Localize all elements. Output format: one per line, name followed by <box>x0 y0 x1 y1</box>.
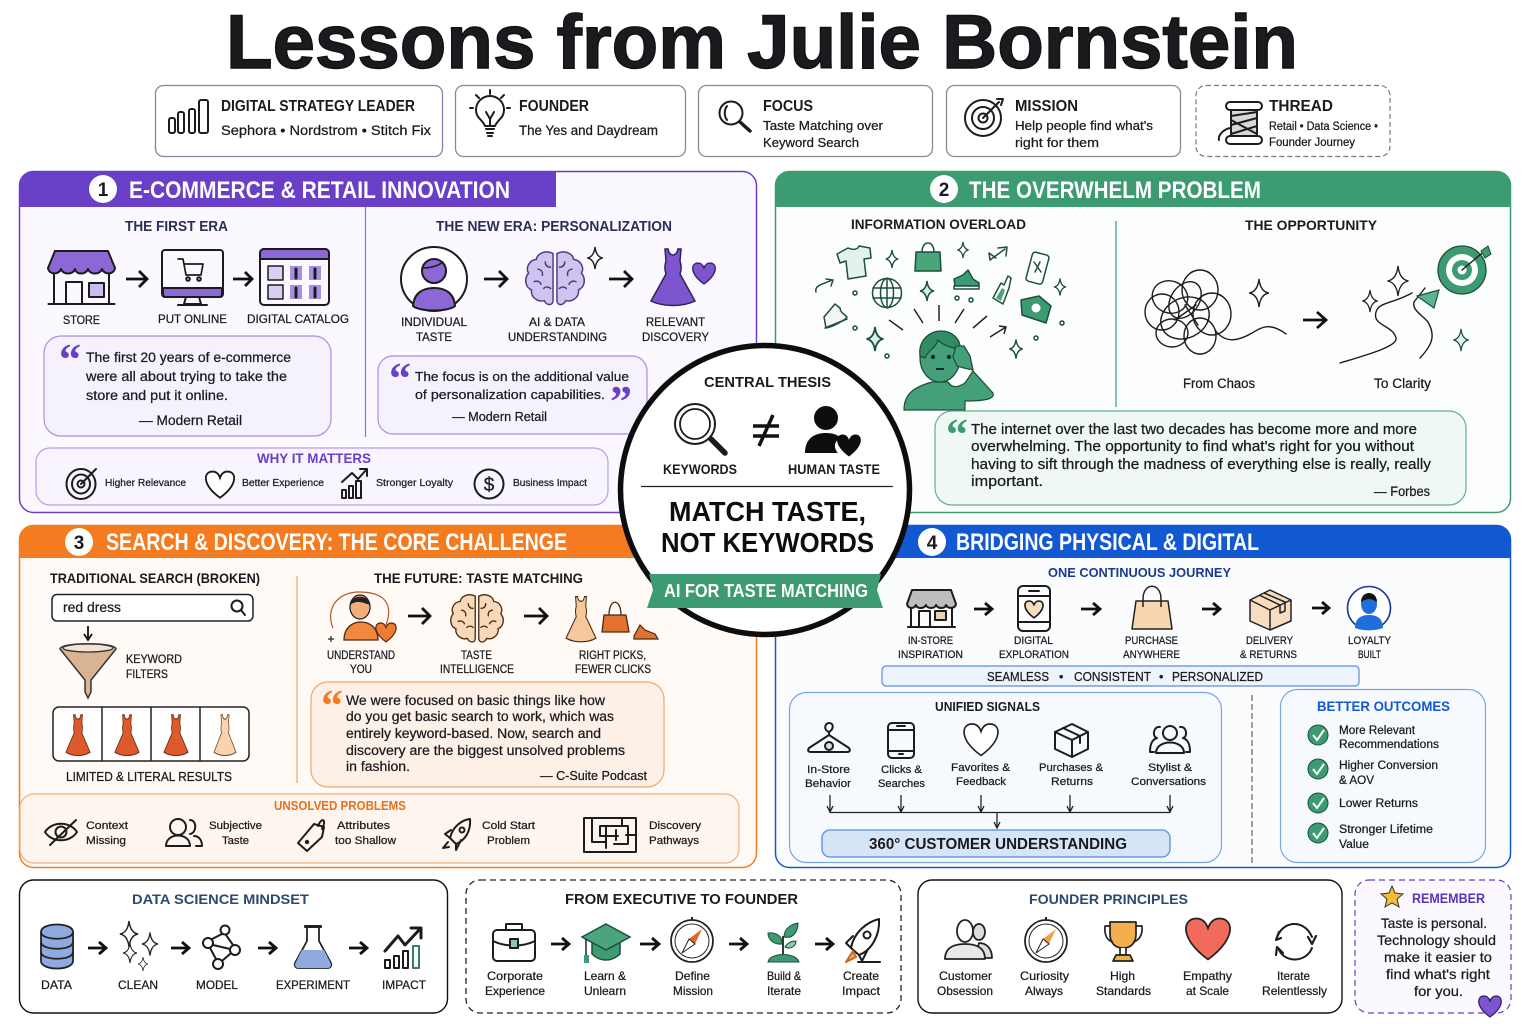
not equal sign <box>753 415 779 446</box>
panel: better outcomes: BETTER OUTCOMES <box>1317 698 1450 714</box>
callout: quote c-suite podcast: in fashion. <box>346 759 410 774</box>
icon: two people <box>166 819 202 846</box>
icon: in-store <box>907 590 956 627</box>
card text <box>763 98 884 150</box>
icon: flask <box>295 925 331 968</box>
icon: digital catalog <box>260 249 329 305</box>
arrow <box>88 942 106 954</box>
labels: Experience <box>485 984 545 998</box>
labels <box>41 978 427 992</box>
thesis statement: MATCH TASTE, <box>669 496 866 527</box>
labels: Relentlessly <box>1262 984 1327 998</box>
info card: founder <box>456 86 686 156</box>
icon: sparkles <box>120 921 158 971</box>
info card: focus <box>698 86 932 156</box>
bar: seamless consistent personalized: CONSISTENT <box>1074 670 1151 684</box>
card text: FOUNDER <box>519 98 589 115</box>
arrow <box>84 626 92 640</box>
icon: heart <box>964 724 998 756</box>
bar: seamless consistent personalized: • <box>1159 670 1163 684</box>
card text: THREAD <box>1269 98 1333 115</box>
card text: FOCUS <box>763 98 813 115</box>
info card: digital strategy leader <box>156 86 442 156</box>
callout: quote c-suite podcast <box>311 681 664 787</box>
labels: first era steps: DIGITAL CATALOG <box>247 312 349 326</box>
labels: signals: Stylist & <box>1148 762 1193 774</box>
icon: brain taste intelligence <box>451 595 503 642</box>
bar: seamless consistent personalized <box>882 666 1359 686</box>
labels: at Scale <box>1186 984 1229 998</box>
callout: quote forbes: The internet over the last two decades has become more and more <box>971 422 1417 438</box>
icon: store <box>48 251 115 304</box>
card text: The Yes and Daydream <box>519 123 658 138</box>
labels: EXPERIMENT <box>276 978 351 992</box>
body text: Taste is personal. <box>1381 915 1487 931</box>
arrow <box>484 271 507 287</box>
arrow <box>126 271 147 287</box>
icon: iterate cycle <box>1276 924 1316 960</box>
icon: price tag <box>298 820 324 851</box>
labels: outcomes list: Higher Conversion <box>1339 760 1438 772</box>
icon: eye crossed <box>45 820 77 845</box>
labels: unsolved problems items: Discovery <box>649 820 702 832</box>
labels: unsolved problems items: Cold Start <box>482 820 535 832</box>
arrow <box>1303 312 1326 328</box>
heading: information overload: INFORMATION OVERLOAD <box>851 216 1026 232</box>
callout: quote first era: store and put it online. <box>86 388 228 403</box>
labels: future steps: YOU <box>350 664 372 676</box>
labels: unsolved problems items: Subjective <box>209 820 262 832</box>
labels: new era steps: INDIVIDUAL <box>401 315 467 329</box>
illustration: floating items overload <box>816 242 1066 358</box>
header band: 3 <box>74 533 84 554</box>
labels: why it matters items: Stronger Loyalty <box>376 477 454 489</box>
arrow <box>408 608 430 624</box>
illustration: clear path to target <box>1340 246 1491 363</box>
card text: MISSION <box>1015 98 1078 115</box>
icon: box <box>1055 724 1088 757</box>
labels: journey steps: & RETURNS <box>1240 649 1297 661</box>
icon: seedling <box>768 923 799 962</box>
callout: quote forbes: — Forbes <box>1374 483 1430 499</box>
icon: target <box>66 469 96 499</box>
callout: quote first era: were all about trying to take the <box>85 369 287 384</box>
panel: unsolved problems: UNSOLVED PROBLEMS <box>274 799 406 813</box>
icon: hanger <box>808 723 850 752</box>
arrow <box>729 938 747 950</box>
panel: search and discovery <box>19 525 756 868</box>
icon: dollar: $ <box>484 475 495 496</box>
labels: keywords vs human taste: HUMAN TASTE <box>788 462 880 477</box>
labels: signals: Behavior <box>805 778 851 790</box>
heading: FROM EXECUTIVE TO FOUNDER <box>565 892 799 908</box>
results grid of dresses <box>53 707 249 761</box>
heading: traditional search: TRADITIONAL SEARCH (BROKEN) <box>50 570 260 586</box>
labels: unsolved problems items: Pathways <box>649 835 700 847</box>
callout: quote forbes: “ <box>946 410 968 459</box>
labels: journey steps <box>898 635 1392 661</box>
icon: delivery box <box>1250 590 1291 630</box>
heading: FOUNDER PRINCIPLES <box>1029 891 1188 907</box>
bar: seamless consistent personalized: PERSONALIZED <box>1172 670 1263 684</box>
callout: quote new era: of personalization capabilities. <box>415 387 605 402</box>
labels: from chaos to clarity: To Clarity <box>1374 376 1431 391</box>
arrow <box>1202 603 1220 615</box>
labels: why it matters items: Business Impact <box>513 477 587 489</box>
labels: Obsession <box>937 984 993 998</box>
icon: model network <box>203 926 240 969</box>
icon: magnifier keywords <box>675 404 725 453</box>
icon: brain <box>526 247 603 305</box>
callout: quote new era: ” <box>610 377 632 426</box>
labels: Always <box>1025 984 1063 998</box>
heading: one continuous journey: ONE CONTINUOUS JOURNEY <box>1048 565 1231 580</box>
body text: find what's right <box>1386 966 1490 982</box>
icon: individual taste person <box>401 247 467 311</box>
callout: quote forbes <box>935 410 1466 505</box>
heading: the opportunity: THE OPPORTUNITY <box>1245 217 1378 233</box>
icon: compass <box>671 917 713 962</box>
card text: Retail • Data Science • <box>1269 121 1378 133</box>
icon: group of people <box>1150 726 1190 753</box>
icon: dress and heart <box>651 249 715 306</box>
labels: signals: Searches <box>878 778 925 790</box>
labels: Standards <box>1096 984 1151 998</box>
labels: signals: Purchases & <box>1039 762 1104 774</box>
labels: journey steps: ANYWHERE <box>1123 649 1180 661</box>
labels: unsolved problems items: too Shallow <box>335 835 396 847</box>
callout: quote first era: The first 20 years of e-commerce <box>86 350 291 365</box>
labels: outcomes list <box>1339 725 1439 851</box>
icon: light bulb <box>470 90 510 136</box>
labels: unsolved problems items: Problem <box>487 835 530 847</box>
labels: journey steps: DELIVERY <box>1246 635 1294 647</box>
icon: compass <box>1025 917 1067 962</box>
labels: signals: Returns <box>1051 776 1094 788</box>
labels: Build & <box>767 969 801 983</box>
icon: loyalty user <box>1348 586 1390 630</box>
icon: phone <box>888 723 914 758</box>
labels: Iterate <box>1277 969 1310 983</box>
icon: trophy <box>1105 922 1142 961</box>
arrow <box>815 938 833 950</box>
panel: unsolved problems <box>20 794 739 863</box>
labels: outcomes list: Stronger Lifetime <box>1339 824 1433 836</box>
panel: why it matters <box>36 448 608 505</box>
card text: DIGITAL STRATEGY LEADER <box>221 98 415 115</box>
ribbon: ai for taste matching: AI FOR TASTE MATCHING <box>664 581 868 601</box>
labels: keywords vs human taste <box>663 462 880 477</box>
callout: quote new era: The focus is on the additional value <box>415 369 629 384</box>
labels: future steps: RIGHT PICKS, <box>579 650 646 662</box>
header band <box>775 171 1511 207</box>
search box: red dress <box>63 599 121 615</box>
labels: journey steps: DIGITAL <box>1014 635 1053 647</box>
labels: Create <box>843 969 879 983</box>
labels: unsolved problems items: Attributes <box>337 820 391 832</box>
labels: Impact <box>842 984 881 998</box>
labels: outcomes list: Value <box>1339 839 1369 851</box>
labels: from chaos to clarity: From Chaos <box>1183 376 1255 391</box>
box: 360 customer understanding: 360° CUSTOMER UNDERSTANDING <box>869 836 1127 853</box>
panel: why it matters: WHY IT MATTERS <box>257 450 371 466</box>
header band <box>19 525 700 558</box>
illustration: overwhelmed person <box>904 331 993 410</box>
icon: heart red <box>1186 918 1230 959</box>
labels: outcomes list: Lower Returns <box>1339 798 1418 810</box>
labels: IMPACT <box>382 978 427 992</box>
labels: Mission <box>673 984 713 998</box>
search box <box>52 594 253 621</box>
card text: Sephora • Nordstrom • Stitch Fix <box>221 123 431 138</box>
labels: new era steps: UNDERSTANDING <box>508 330 607 344</box>
bar: seamless consistent personalized: • <box>1059 670 1063 684</box>
label: limited results: LIMITED & LITERAL RESULTS <box>66 770 232 784</box>
icon: maze <box>584 818 636 852</box>
arrow <box>171 942 189 954</box>
labels: unsolved problems items: Missing <box>86 835 126 847</box>
icon: understand you <box>328 592 396 642</box>
header band: THE OVERWHELM PROBLEM <box>969 177 1261 204</box>
labels: future steps <box>327 650 651 676</box>
icon: star <box>1381 886 1403 907</box>
callout: quote new era: “ <box>389 354 411 403</box>
icon: heart <box>206 472 234 498</box>
labels: first era steps: STORE <box>63 313 100 327</box>
thesis statement <box>661 496 874 558</box>
labels: from chaos to clarity <box>1183 376 1431 391</box>
card text: right for them <box>1015 135 1099 150</box>
arrow <box>233 272 252 286</box>
panel: better outcomes <box>1280 690 1486 862</box>
panel: remember <box>1355 880 1511 1017</box>
header band: BRIDGING PHYSICAL & DIGITAL <box>956 529 1259 556</box>
callout: quote forbes: important. <box>971 474 1043 490</box>
callout: quote c-suite podcast: We were focused on basic things like how <box>346 693 605 708</box>
labels: unsolved problems items: Context <box>86 820 128 832</box>
icon: right picks dress bag shoe <box>566 597 658 642</box>
labels: first era steps: PUT ONLINE <box>158 312 227 326</box>
labels: signals: In-Store <box>807 764 850 776</box>
labels: journey steps: INSPIRATION <box>898 649 963 661</box>
arrow <box>524 608 547 624</box>
callout: quote c-suite podcast: discovery are the biggest unsolved problems <box>346 743 625 758</box>
header band: E-COMMERCE & RETAIL INNOVATION <box>129 177 510 204</box>
labels <box>485 969 881 998</box>
card text <box>1015 98 1154 150</box>
icon: phone with heart <box>1018 586 1050 631</box>
labels: new era steps: DISCOVERY <box>642 330 709 344</box>
labels: unsolved problems items: Taste <box>222 835 249 847</box>
labels: Learn & <box>584 969 626 983</box>
labels: Customer <box>939 969 992 983</box>
callout: quote c-suite podcast: do you get basic search to work, which was <box>346 709 614 724</box>
icon: bar chart <box>169 100 208 133</box>
heading: the new era: THE NEW ERA: PERSONALIZATION <box>436 219 672 235</box>
ribbon: ai for taste matching <box>647 574 883 608</box>
icon: database <box>41 924 73 968</box>
card text: Taste Matching over <box>763 118 884 133</box>
illustration: tangled scribble chaos <box>1145 270 1286 354</box>
panel: the overwhelm problem <box>775 171 1511 512</box>
labels: MODEL <box>196 978 238 992</box>
icon: human taste <box>805 406 861 457</box>
icon: customers <box>945 920 992 959</box>
panel: from executive to founder <box>466 880 901 1013</box>
heading: the first era: THE FIRST ERA <box>125 219 228 235</box>
labels: future steps: FEWER CLICKS <box>575 664 651 676</box>
labels: Iterate <box>767 984 801 998</box>
labels: new era steps: RELEVANT <box>646 315 706 329</box>
panel: unified signals: UNIFIED SIGNALS <box>935 700 1040 714</box>
labels: Define <box>675 969 710 983</box>
labels: DATA <box>41 978 72 992</box>
icon: dollar <box>474 470 504 498</box>
labels: signals: Favorites & <box>951 762 1011 774</box>
icon: purple heart <box>1479 996 1501 1017</box>
icon: thread spool <box>1219 102 1262 144</box>
labels: journey steps: BUILT <box>1358 649 1381 661</box>
callout: quote new era <box>378 354 647 434</box>
icon: impact growth <box>385 928 421 968</box>
card text <box>519 98 658 138</box>
panel: data science mindset <box>20 880 448 1013</box>
icon: target <box>965 99 1003 136</box>
panel: bridging physical and digital <box>776 525 1511 868</box>
body text: Technology should <box>1377 932 1496 948</box>
labels: future steps: UNDERSTAND <box>327 650 395 662</box>
thesis statement: NOT KEYWORDS <box>661 527 874 558</box>
header band: 4 <box>927 533 938 554</box>
heading: REMEMBER <box>1412 891 1485 906</box>
header band <box>19 171 556 207</box>
labels: first era steps <box>63 312 349 327</box>
labels: outcomes list: More Relevant <box>1339 725 1416 737</box>
labels: why it matters items: Higher Relevance <box>105 477 186 489</box>
card text: Founder Journey <box>1269 137 1355 149</box>
labels: why it matters items <box>105 477 587 489</box>
labels: why it matters items: Better Experience <box>242 477 324 489</box>
panel: founder principles <box>918 880 1342 1013</box>
header band: SEARCH & DISCOVERY: THE CORE CHALLENGE <box>106 529 567 556</box>
labels: future steps: INTELLIGENCE <box>440 664 514 676</box>
label: keyword filters: KEYWORD <box>126 654 182 666</box>
labels: journey steps: IN-STORE <box>908 635 953 647</box>
labels: Curiosity <box>1020 969 1069 983</box>
labels: journey steps: EXPLORATION <box>999 649 1069 661</box>
icon: rocket <box>443 819 470 850</box>
bar: seamless consistent personalized: SEAMLESS <box>987 670 1049 684</box>
icon: sparkle <box>1249 279 1269 307</box>
title: Lessons from Julie Bornstein <box>226 0 1298 85</box>
arrow <box>640 938 659 950</box>
heading: the future: THE FUTURE: TASTE MATCHING <box>374 570 583 586</box>
labels <box>937 969 1327 998</box>
body text: make it easier to <box>1384 949 1492 965</box>
arrow <box>551 938 569 950</box>
icon: briefcase <box>493 924 535 961</box>
labels: outcomes list: & AOV <box>1339 775 1374 787</box>
heading: DATA SCIENCE MINDSET <box>132 891 309 907</box>
body text <box>1377 915 1496 999</box>
callout: quote first era <box>44 335 331 436</box>
callout: quote c-suite podcast: — C-Suite Podcast <box>540 768 647 783</box>
callout: quote new era: — Modern Retail <box>452 409 547 424</box>
labels: Empathy <box>1183 969 1232 983</box>
arrow <box>974 603 992 615</box>
labels: future steps: TASTE <box>461 650 492 662</box>
labels: unsolved problems items <box>86 820 702 847</box>
info card: mission <box>946 86 1180 156</box>
callout: quote first era: — Modern Retail <box>139 413 242 428</box>
card text <box>221 98 431 138</box>
labels: journey steps: PURCHASE <box>1125 635 1178 647</box>
labels: new era steps: TASTE <box>416 330 452 344</box>
labels: outcomes list: Recommendations <box>1339 739 1439 751</box>
icon: computer monitor with cart <box>162 250 223 305</box>
labels: journey steps: LOYALTY <box>1348 635 1392 647</box>
arrow <box>1312 602 1329 614</box>
box: 360 customer understanding <box>822 830 1170 857</box>
labels: High <box>1110 969 1135 983</box>
panel: unified signals <box>790 692 1222 862</box>
labels: new era steps <box>401 315 709 344</box>
labels: Corporate <box>487 969 543 983</box>
arrow <box>609 271 632 287</box>
label: keyword filters <box>126 654 182 681</box>
callout: quote first era: “ <box>59 335 81 384</box>
arrow <box>349 942 367 954</box>
labels: keywords vs human taste: KEYWORDS <box>663 462 737 477</box>
labels: signals: Feedback <box>956 776 1007 788</box>
icon: graduation cap <box>582 924 630 963</box>
arrow <box>1081 603 1100 615</box>
labels: Unlearn <box>584 984 626 998</box>
labels: signals <box>805 762 1207 790</box>
labels: signals: Clicks & <box>881 764 923 776</box>
card text <box>1269 98 1378 149</box>
central thesis badge <box>620 346 910 634</box>
callout: quote forbes: overwhelming. The opportunity to find what's right for you without <box>971 439 1414 455</box>
header band: 2 <box>939 180 949 201</box>
label: keyword filters: FILTERS <box>126 669 168 681</box>
icon: rocket <box>846 919 880 962</box>
icon: shopping bag <box>1132 586 1172 629</box>
icon: magnifier <box>720 102 750 131</box>
icon: growth chart <box>342 469 367 498</box>
card text: Keyword Search <box>763 135 859 150</box>
header band: 1 <box>98 180 109 201</box>
labels: new era steps: AI & DATA <box>529 315 585 329</box>
callout: quote forbes: having to sift through the madness of everything else is really, really <box>971 457 1432 473</box>
heading: central thesis: CENTRAL THESIS <box>704 374 831 391</box>
arrow <box>258 942 276 954</box>
panel: e-commerce and retail innovation <box>19 171 756 512</box>
icon: funnel <box>60 644 116 698</box>
info card: thread <box>1196 86 1390 156</box>
card text: Help people find what's <box>1015 118 1154 133</box>
labels: signals: Conversations <box>1131 776 1207 788</box>
arrows: signals converge <box>827 795 1173 828</box>
header band <box>830 525 1511 558</box>
body text: for you. <box>1414 983 1463 999</box>
labels: CLEAN <box>118 978 158 992</box>
callout: quote c-suite podcast: “ <box>321 681 343 730</box>
icons: check marks <box>1308 725 1328 843</box>
callout: quote c-suite podcast: entirely keyword-based. Now, search and <box>346 726 601 741</box>
